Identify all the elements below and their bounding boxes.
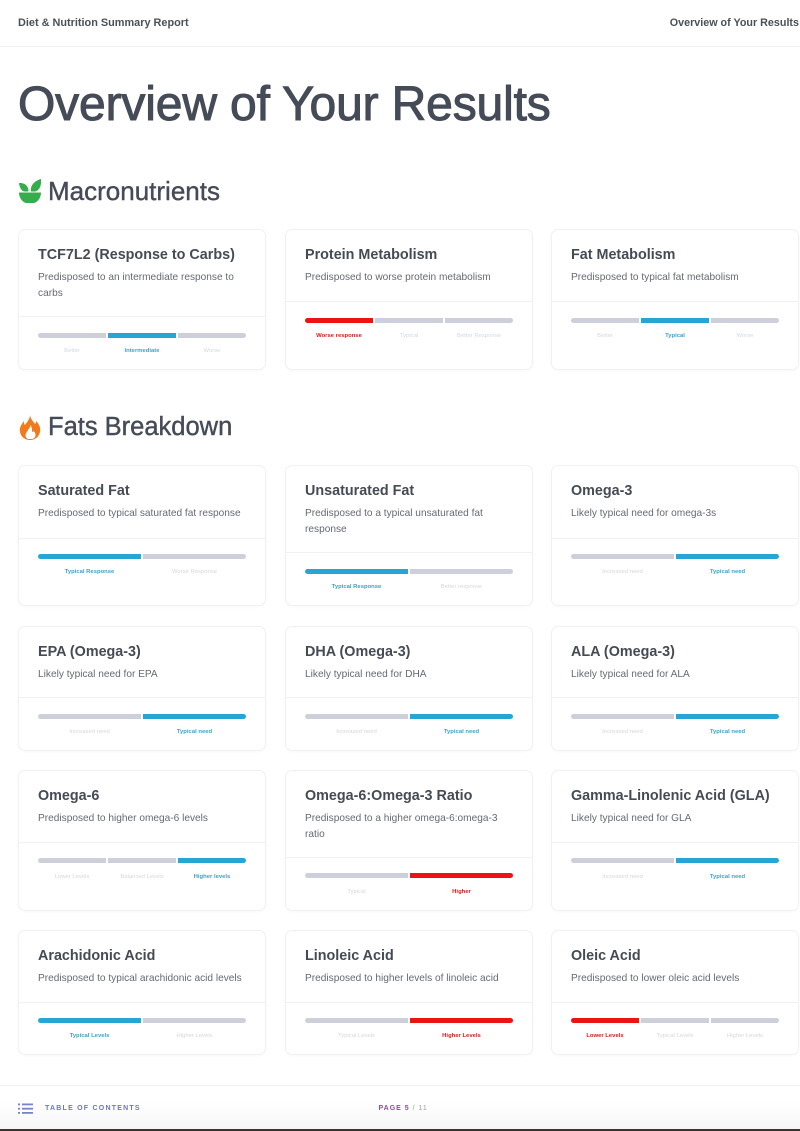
card: GLA: Gamma-Linolenic Acid (GLA): [571, 788, 770, 804]
card: Fat Metabolism: Fat Metabolism: [571, 247, 675, 263]
card: Protein Metabolism: Predisposed to worse protein metabolism: [305, 272, 491, 283]
card: Arachidonic Acid: Higher Levels: [176, 1033, 213, 1039]
card: DHA: Increased need: [336, 729, 377, 735]
card: Saturated Fat: Typical Response: [65, 569, 114, 575]
card: Omega-6:Omega-3 Ratio: Omega-6:Omega-3 Ratio: [305, 788, 472, 804]
card: Linoleic Acid: Higher Levels: [442, 1033, 481, 1039]
card: EPA: [18, 626, 266, 751]
card: Omega-3: Omega-3: [571, 483, 632, 499]
card: TCF7L2: Intermediate: [124, 348, 160, 354]
card: GLA: Likely typical need for GLA: [571, 813, 691, 824]
card: Omega-3: Increased need: [602, 569, 643, 575]
card: EPA: Likely typical need for EPA: [38, 669, 158, 680]
header divider: [0, 46, 800, 47]
card: Saturated Fat: [18, 465, 266, 606]
card: Omega-6: [18, 770, 266, 911]
card: DHA: Typical need: [444, 729, 479, 735]
card: DHA: DHA (Omega-3): [305, 644, 410, 660]
card: DHA: [285, 626, 533, 751]
card: Omega-3: Likely typical need for omega-3s: [571, 508, 716, 519]
header: section name: Overview of Your Results: [670, 17, 799, 29]
card: TCF7L2: Predisposed to an intermediate response to carbs: [38, 272, 234, 298]
card: Protein Metabolism: Typical: [400, 333, 418, 339]
card: GLA: [551, 770, 799, 911]
card: GLA: Typical need: [710, 874, 745, 880]
icon: flame: [20, 415, 40, 440]
card: TCF7L2: Better: [64, 348, 80, 354]
card: Oleic Acid: Higher Levels: [727, 1033, 763, 1039]
card: ALA: ALA (Omega-3): [571, 644, 675, 660]
footer background gradient: [0, 1100, 800, 1129]
card: Fat Metabolism: Better: [597, 333, 613, 339]
card: Protein Metabolism: Better Response: [457, 333, 501, 339]
card: Protein Metabolism: Protein Metabolism: [305, 247, 437, 263]
card: Fat Metabolism: Predisposed to typical fat metabolism: [571, 272, 739, 283]
card: ALA: Likely typical need for ALA: [571, 669, 690, 680]
card: GLA: Increased need: [602, 874, 643, 880]
card: Linoleic Acid: Predisposed to higher levels of linoleic acid: [305, 973, 499, 984]
card: Saturated Fat: Saturated Fat: [38, 483, 130, 499]
card: Unsaturated Fat: Better response: [441, 584, 482, 590]
card: Protein Metabolism: Worse response: [316, 333, 362, 339]
bottom edge strip: [0, 1129, 800, 1131]
card: EPA: EPA (Omega-3): [38, 644, 141, 660]
card: Saturated Fat: Worse Response: [172, 569, 217, 575]
card: Omega-6: Balanced Levels: [120, 874, 164, 880]
card: Arachidonic Acid: Predisposed to typical arachidonic acid levels: [38, 973, 242, 984]
card: Omega-6: Higher levels: [194, 874, 230, 880]
card: Omega-6:Omega-3 Ratio: [285, 770, 533, 911]
card: Omega-6:Omega-3 Ratio: Higher: [452, 889, 471, 895]
card: Omega-3: [551, 465, 799, 606]
icon: leaf bowl: [19, 179, 42, 203]
card: Unsaturated Fat: Typical Response: [332, 584, 381, 590]
card: Oleic Acid: Oleic Acid: [571, 948, 641, 964]
icon: list: [18, 1104, 33, 1114]
card: Fat Metabolism: Worse: [737, 333, 753, 339]
card: Oleic Acid: Lower Levels: [586, 1033, 624, 1039]
card: Linoleic Acid: Typical Levels: [338, 1033, 375, 1039]
card: EPA: Increased need: [69, 729, 110, 735]
footer: page number: PAGE 5 / 11: [378, 1104, 428, 1112]
card: Omega-3: Typical need: [710, 569, 745, 575]
card: Fat Metabolism: Typical: [665, 333, 685, 339]
card: Fat Metabolism: [551, 229, 799, 370]
header: report name: Diet & Nutrition Summary Report: [18, 17, 189, 29]
card: ALA: [551, 626, 799, 751]
card: Linoleic Acid: [285, 930, 533, 1055]
heading: Macronutrients: Macronutrients: [48, 176, 220, 206]
card: Arachidonic Acid: Typical Levels: [70, 1033, 109, 1039]
card: DHA: Likely typical need for DHA: [305, 669, 427, 680]
card: Saturated Fat: Predisposed to typical saturated fat response: [38, 508, 241, 519]
card: TCF7L2: Worse: [204, 348, 220, 354]
card: Protein Metabolism: [285, 229, 533, 370]
card: EPA: Typical need: [177, 729, 212, 735]
card: TCF7L2: [18, 229, 266, 370]
card: Arachidonic Acid: [18, 930, 266, 1055]
card: ALA: Increased need: [602, 729, 643, 735]
card: Oleic Acid: Predisposed to lower oleic acid levels: [571, 973, 739, 984]
title: Overview of Your Results: [18, 78, 551, 131]
card: Omega-6:Omega-3 Ratio: Predisposed to a higher omega-6:omega-3 ratio: [305, 813, 498, 840]
card: Linoleic Acid: Linoleic Acid: [305, 948, 394, 964]
footer: table of contents: TABLE OF CONTENTS: [45, 1104, 141, 1112]
card: Omega-6: Predisposed to higher omega-6 levels: [38, 813, 208, 824]
card: TCF7L2: TCF7L2 (Response to Carbs): [38, 247, 235, 263]
heading: Fats Breakdown: Fats Breakdown: [48, 413, 232, 441]
card: ALA: Typical need: [710, 729, 745, 735]
card: Unsaturated Fat: Unsaturated Fat: [305, 483, 414, 499]
card: Unsaturated Fat: [285, 465, 533, 606]
card: Oleic Acid: [551, 930, 799, 1055]
card: Omega-6: Omega-6: [38, 788, 99, 804]
card: Omega-6:Omega-3 Ratio: Typical: [347, 889, 366, 895]
card: Oleic Acid: Typical Levels: [656, 1033, 694, 1039]
card: Unsaturated Fat: Predisposed to a typical unsaturated fat response: [305, 508, 483, 534]
footer divider: [0, 1085, 800, 1086]
card: Arachidonic Acid: Arachidonic Acid: [38, 948, 155, 964]
card: Omega-6: Lower Levels: [55, 874, 89, 880]
